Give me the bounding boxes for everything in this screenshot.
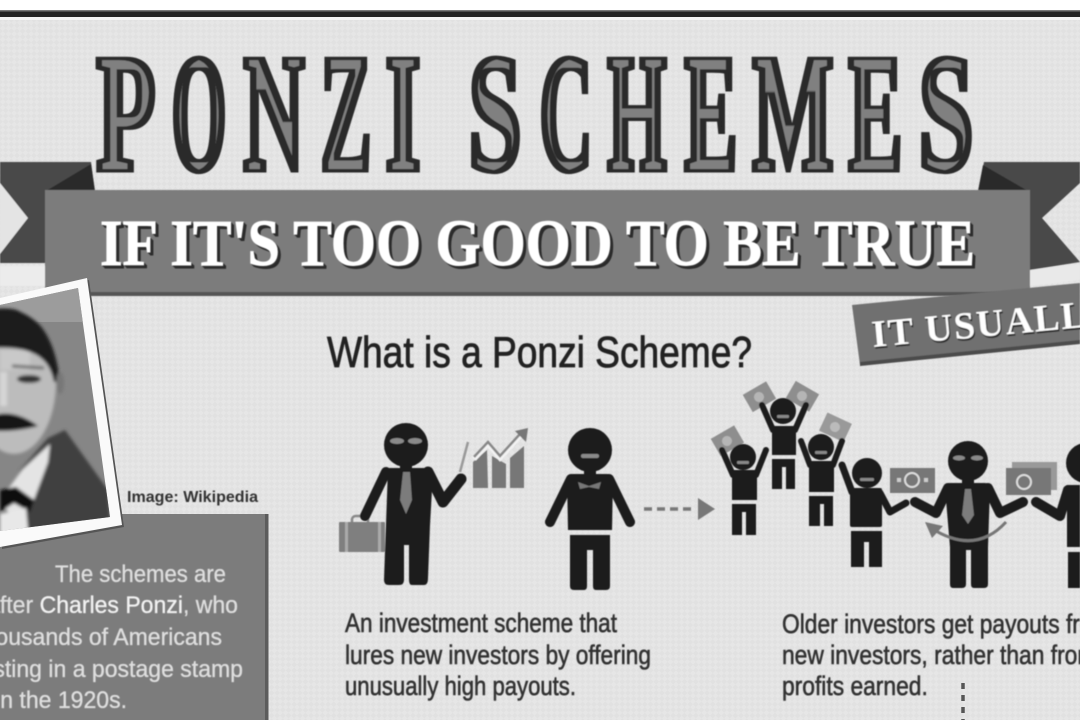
ribbon right wing: [978, 162, 1080, 286]
ribbon left wing: [0, 162, 95, 286]
title: M: [752, 21, 834, 205]
title: O: [171, 21, 227, 205]
title: P: [96, 21, 156, 205]
side text: The schemes are: [55, 561, 226, 588]
icon: rising chart: [473, 428, 528, 488]
text: how payouts work: profits earned.: [782, 671, 928, 701]
figure: investor B: [743, 381, 819, 489]
subtitle: IF IT'S TOO GOOD TO BE TRUE: [100, 207, 975, 280]
image credit: Image: Wikipedia: [127, 489, 258, 506]
connector: dotted line: [961, 683, 965, 720]
text: how payouts work: [782, 609, 1080, 701]
text: definition: lures new investors by offering: [345, 640, 651, 670]
figure: promoter: [365, 423, 468, 585]
photo: Charles Ponzi: [0, 278, 125, 549]
illustration: promoter paying out: [915, 441, 1080, 588]
figure: new investor: [550, 428, 630, 590]
title: S: [468, 21, 522, 205]
figure: investor A: [711, 425, 766, 535]
title: E: [848, 21, 903, 205]
side text: [0, 561, 243, 713]
arrow: dashed: [644, 498, 715, 520]
side text box: [0, 514, 268, 720]
arrow: curved payout: [925, 522, 1006, 541]
figure: investor D: [842, 458, 906, 567]
icon: briefcase: [339, 516, 385, 552]
title: N: [243, 21, 305, 205]
ribbon banner: [0, 162, 1080, 296]
figure: investor cropped: [1036, 443, 1080, 588]
figure: investor C: [801, 412, 852, 526]
icon: banknote stack: [1006, 462, 1057, 495]
title: I: [385, 21, 421, 205]
title: E: [684, 21, 738, 205]
text: definition: An investment scheme that: [345, 608, 617, 638]
illustration: promoter with chart: [339, 423, 528, 585]
ribbon main band: [45, 190, 1030, 296]
section heading: What is a Ponzi Scheme?: [327, 328, 752, 377]
figure: promoter: [915, 441, 1023, 588]
text: definition: unusually high payouts.: [345, 671, 576, 701]
title: H: [607, 21, 667, 205]
title: C: [539, 21, 593, 205]
title: [96, 21, 974, 205]
title: Z: [320, 21, 372, 205]
illustration: earlier investors cheering: [711, 381, 935, 567]
icon: banknote: [890, 468, 935, 493]
title: S: [918, 21, 974, 205]
text: definition: [345, 608, 651, 701]
